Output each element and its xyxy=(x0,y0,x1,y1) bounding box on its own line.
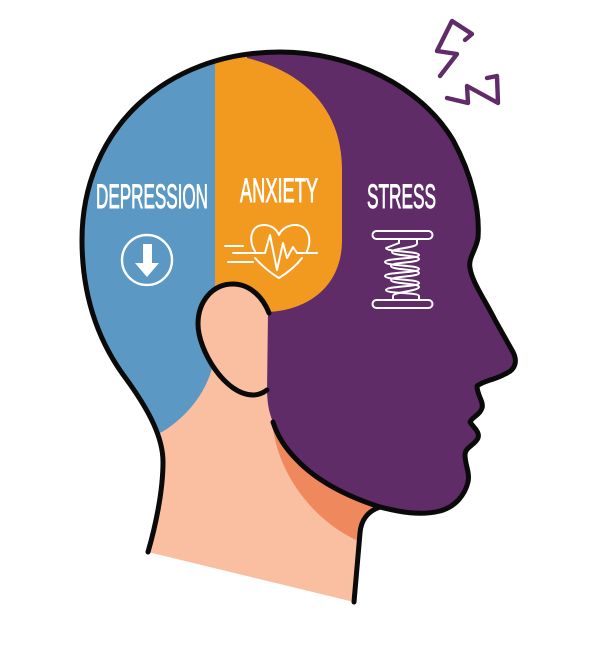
icon: heart with pulse xyxy=(225,225,317,278)
neck shadow xyxy=(273,430,373,540)
region: anxiety xyxy=(215,30,342,312)
label: stress: STRESS xyxy=(367,178,436,216)
icon: compressed spring xyxy=(372,231,432,308)
region: depression xyxy=(84,64,215,433)
label: anxiety: ANXIETY xyxy=(240,172,318,210)
ear outline xyxy=(198,284,269,395)
label: depression: DEPRESSION xyxy=(96,178,208,216)
icon: lightning bolt lower xyxy=(447,76,498,103)
head infographic xyxy=(80,18,518,604)
head outline xyxy=(82,52,515,602)
region: stress xyxy=(247,54,513,511)
icon: lightning bolt upper xyxy=(437,21,472,76)
skin: head and neck base xyxy=(84,54,513,602)
icon: down arrow in circle xyxy=(122,235,172,285)
neck front line xyxy=(354,507,380,602)
ear fill xyxy=(198,284,268,395)
